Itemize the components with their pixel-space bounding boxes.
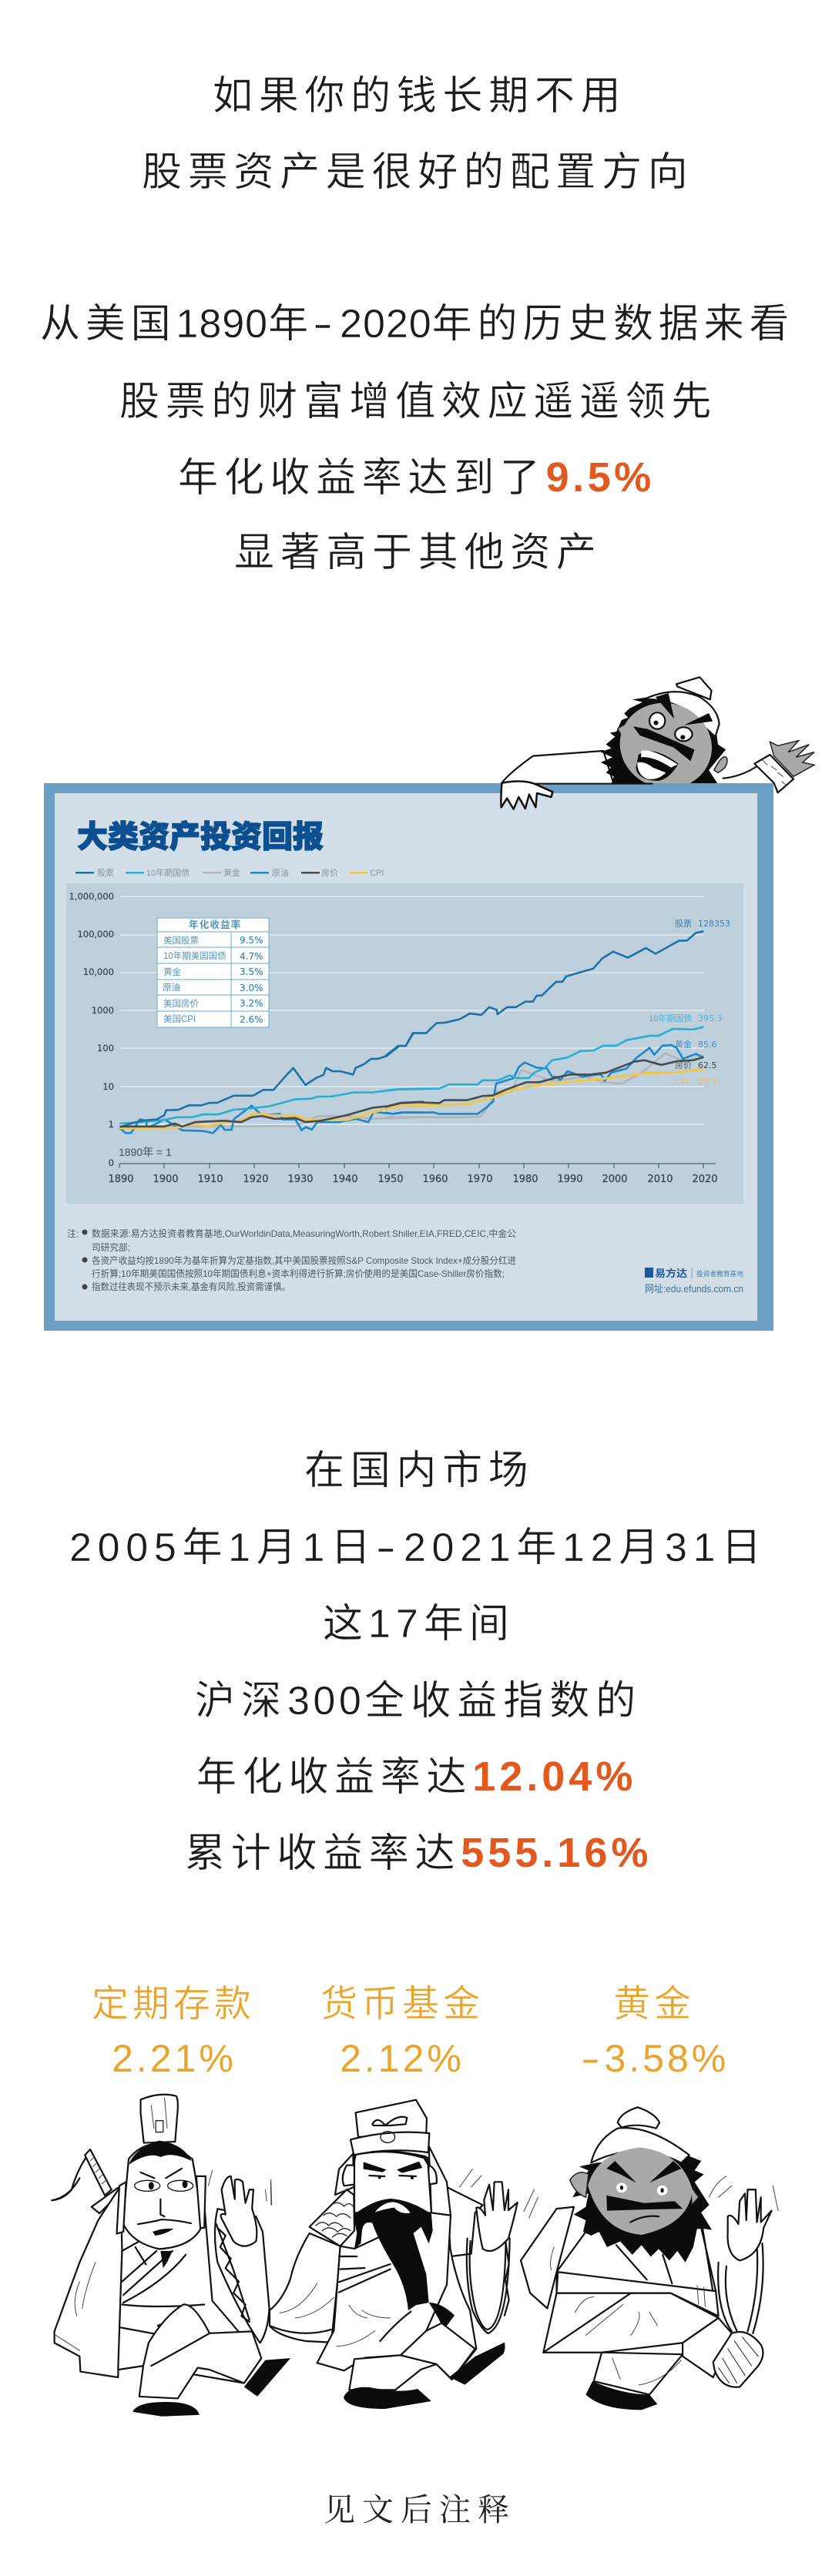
line: annual return with highlight: 年化收益率达到了9.5% [178, 454, 655, 501]
heading line 1: 如果你的钱长期不用 [213, 74, 626, 119]
line chart: asset returns 1890-2020: 128353 [698, 919, 730, 929]
chart notes: 指数过往表现不预示未来,基金有风险,投资需谨慎。 [92, 1281, 290, 1292]
label: gold: 黄金 [613, 1984, 695, 2025]
value: gold: 3.58% [604, 2037, 729, 2080]
brand logo and website: 投资者教育基地 [696, 1270, 743, 1278]
table: annualised returns: 美国股票 [163, 935, 199, 946]
chart legend: CPI [370, 869, 384, 878]
line chart: asset returns 1890-2020: 1950 [377, 1174, 404, 1185]
brand logo and website [645, 1268, 743, 1295]
line chart: asset returns 1890-2020: 1890年 = 1 [119, 1146, 172, 1158]
line chart: asset returns 1890-2020: 1900 [153, 1174, 179, 1185]
line chart: asset returns 1890-2020: 1,000,000 [69, 891, 114, 902]
line: data range: 从美国1890年 2020年的历史数据来看 [40, 302, 794, 347]
table: annualised returns: 9.5% [240, 935, 263, 946]
table: annualised returns: 3.2% [240, 998, 263, 1009]
line: wealth effect: 股票的财富增值效应遥遥领先 [119, 380, 717, 424]
line: annualised return: 年化收益率达12.04% [196, 1754, 636, 1800]
line chart: asset returns 1890-2020: 1980 [512, 1174, 538, 1185]
table: annualised returns: 美国房价 [163, 998, 199, 1009]
value: money fund: 2.12% [340, 2037, 465, 2080]
panel: chart frame [44, 783, 773, 1331]
line chart: asset returns 1890-2020: 1930 [287, 1174, 314, 1185]
text block: US history [40, 302, 794, 575]
chart notes [67, 1228, 516, 1292]
table: annualised returns: 美国CPI [163, 1013, 196, 1024]
line chart: asset returns 1890-2020: 黄金 [675, 1039, 692, 1050]
table: annualised returns: 黄金 [163, 966, 181, 977]
line: CSI 300: 沪深300全收益指数的 [195, 1679, 642, 1723]
line: cumulative return: 累计收益率达555.16% [185, 1830, 652, 1876]
line chart: asset returns 1890-2020: 2010 [647, 1174, 673, 1185]
line chart: asset returns 1890-2020: 1000 [92, 1005, 114, 1016]
table: annualised returns: 3.0% [240, 983, 263, 993]
line chart: asset returns 1890-2020: 395.3 [698, 1013, 723, 1023]
line: seventeen years: 这17年间 [323, 1602, 515, 1646]
chart legend: 10年期国债 [146, 867, 190, 878]
chart legend [75, 867, 384, 878]
line chart: asset returns 1890-2020: 85.6 [698, 1040, 716, 1050]
chart notes: 行折算;10年期美国国债按照10年期国债利息+资本利得进行折算;房价使用的是美国Case-Shiller房价指数; [92, 1268, 505, 1279]
icon: cartoon official with sword [52, 2095, 290, 2417]
line chart: asset returns 1890-2020: 1990 [557, 1174, 583, 1185]
footnote pointer: 见文后注释 [324, 2492, 516, 2527]
icon: hand gripping the frame [501, 782, 653, 809]
line: date range: 2005年1月1日 2021年12月31日 [69, 1526, 767, 1570]
chart legend: 房价 [321, 868, 338, 878]
brand logo and website: 网址:edu.efunds.com.cn [645, 1283, 743, 1295]
line chart: asset returns 1890-2020: 10 [102, 1081, 114, 1092]
table: annualised returns: 4.7% [240, 951, 263, 962]
chart legend: 股票 [97, 868, 114, 878]
chart notes: 注: [67, 1228, 79, 1239]
line chart: asset returns 1890-2020: 2020 [692, 1174, 718, 1185]
line chart: asset returns 1890-2020: 1970 [467, 1174, 493, 1185]
line chart: asset returns 1890-2020: 2000 [602, 1174, 628, 1185]
line chart: asset returns 1890-2020: 房价 [675, 1060, 692, 1070]
chart notes: 各资产收益均按1890年为基年折算为定基指数,其中美国股票按照S&P Composite Stock Index+成分股分红进 [92, 1255, 516, 1266]
line: domestic market: 在国内市场 [304, 1449, 535, 1493]
chart notes: 司研究部; [92, 1241, 130, 1253]
line chart: asset returns 1890-2020: 29.3 [698, 1077, 716, 1087]
line chart: asset returns 1890-2020: 10,000 [83, 966, 114, 977]
line: date range: - [376, 1526, 404, 1570]
line chart: asset returns 1890-2020: 1890 [108, 1174, 134, 1185]
line: other assets: 显著高于其他资产 [234, 531, 602, 575]
line chart: asset returns 1890-2020: 1960 [422, 1174, 448, 1185]
line chart: asset returns 1890-2020: 股票 [675, 919, 692, 929]
heading line 2: 股票资产是很好的配置方向 [142, 150, 693, 195]
heading block: long-term money [142, 74, 693, 195]
icon: cartoon grey-faced warrior [521, 2107, 778, 2410]
chart notes: 数据来源:易方达投资者教育基地,OurWorldinData,MeasuringWorth,Robert Shiller,EIA,FRED,CEIC,中金公 [92, 1228, 516, 1239]
label: money fund: 货币基金 [320, 1984, 484, 2025]
brand logo and website: 易方达 [655, 1268, 687, 1279]
label: time deposit: 定期存款 [92, 1984, 255, 2025]
value: time deposit: 2.21% [112, 2037, 237, 2080]
table: annualised returns: 2.6% [240, 1014, 263, 1025]
icon: cartoon general with long black beard [270, 2100, 538, 2390]
line chart: asset returns 1890-2020 [69, 891, 730, 1185]
line chart: asset returns 1890-2020: 1940 [332, 1174, 358, 1185]
text block: domestic market [69, 1449, 767, 1876]
heading: chart title: 大类资产投资回报 [77, 820, 324, 854]
table: annualised returns: 10年期美国国债 [163, 950, 226, 961]
line chart: asset returns 1890-2020: 1920 [243, 1174, 269, 1185]
table: annualised returns: 3.5% [240, 966, 263, 977]
asset labels: returns of alternatives [92, 1984, 729, 2080]
line chart: asset returns 1890-2020: 1910 [197, 1174, 223, 1185]
line chart: asset returns 1890-2020: 1 [109, 1119, 114, 1130]
line chart: asset returns 1890-2020: 100 [97, 1043, 114, 1054]
table: annualised returns: 年化收益率 [189, 919, 242, 930]
line chart: asset returns 1890-2020: 62.5 [698, 1060, 716, 1070]
line chart: asset returns 1890-2020: 0 [109, 1157, 114, 1168]
icon: cartoon man peeking over the chart [502, 677, 814, 801]
line chart: asset returns 1890-2020: 100,000 [77, 929, 114, 940]
table: annualised returns [157, 918, 269, 1027]
line chart: asset returns 1890-2020: CPI [675, 1077, 689, 1087]
value: gold: - [581, 2037, 605, 2080]
table: annualised returns: 原油 [163, 982, 180, 993]
chart legend: 原油 [272, 867, 289, 878]
icon: general's lower shoe [344, 2387, 431, 2409]
chart legend: 黄金 [223, 867, 240, 878]
line chart: asset returns 1890-2020: 10年期国债 [649, 1013, 692, 1023]
line: data range: - [313, 302, 341, 347]
